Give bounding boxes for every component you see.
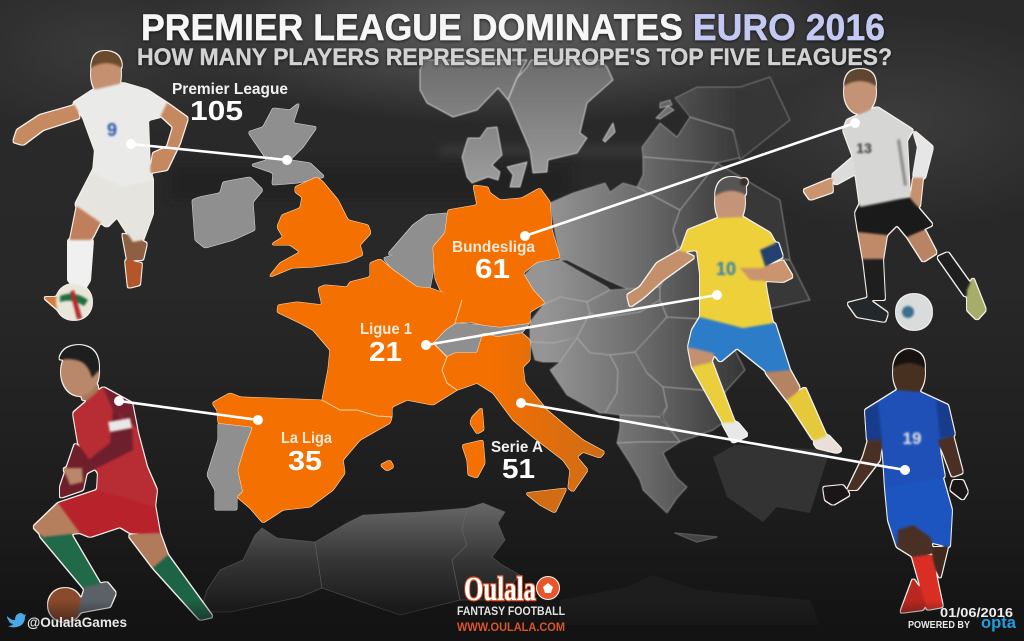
portugal — [207, 423, 253, 510]
switzerland — [433, 322, 530, 357]
label: Serie A: Serie A — [491, 439, 543, 456]
date: 01/06/2016 — [940, 606, 1013, 620]
player: Ibrahimovic: 10 — [716, 259, 736, 279]
grey neighbours — [192, 102, 530, 510]
player: Müller — [803, 69, 986, 330]
head — [91, 51, 122, 106]
label: Bundesliga — [452, 239, 535, 284]
player: Ronaldo — [33, 345, 213, 622]
map of Europe — [192, 60, 830, 625]
label: Bundesliga: Bundesliga — [452, 239, 535, 256]
label: Ligue 1: 21 — [369, 336, 402, 367]
eastern europe — [523, 77, 810, 513]
powered by opta: POWERED BY — [908, 619, 970, 631]
belgium — [383, 245, 435, 288]
shirt number: 9 — [107, 120, 117, 140]
faint libya coast — [560, 575, 820, 625]
ball — [896, 294, 932, 330]
connector lines — [114, 118, 910, 475]
player: Kane — [13, 51, 188, 320]
label: Premier League: 105 — [190, 95, 243, 126]
label: Ligue 1: Ligue 1 — [360, 321, 412, 338]
label: Bundesliga: 61 — [475, 253, 510, 284]
subtitle: HOW MANY PLAYERS REPRESENT EUROPE'S TOP FIVE LEAGUES? — [137, 44, 892, 71]
label: Premier League: Premier League — [172, 81, 288, 98]
player: Ibrahimovic — [627, 177, 842, 453]
icon: ball — [536, 576, 560, 600]
italy — [442, 333, 605, 492]
corsica — [470, 407, 484, 434]
north africa — [200, 503, 520, 615]
line: Ligue 1 — [421, 290, 722, 350]
germany — [433, 185, 560, 327]
label: La Liga: La Liga — [281, 430, 332, 447]
country borders inside orange — [322, 300, 462, 417]
spain — [212, 393, 392, 523]
sardinia — [462, 440, 485, 478]
powered by opta: opta — [981, 613, 1017, 632]
player: Pogba: 19 — [903, 429, 921, 448]
ball — [48, 588, 82, 622]
line: Bundesliga — [520, 118, 860, 241]
scandinavia — [420, 60, 674, 187]
bottom fade — [0, 600, 1024, 641]
player: Pogba — [823, 349, 968, 613]
label: Serie A: 51 — [502, 453, 535, 484]
powered by opta — [908, 613, 1017, 632]
label: La Liga: 35 — [288, 445, 322, 476]
mallorca — [380, 460, 394, 471]
label: Serie A — [491, 439, 543, 484]
label: Ligue 1 — [360, 321, 412, 367]
player: Müller: 13 — [856, 140, 872, 156]
line: Premier League — [126, 139, 292, 165]
fantasy football text: FANTASY FOOTBALL — [457, 606, 565, 618]
line: Serie A — [516, 398, 910, 475]
scotland — [248, 102, 325, 185]
ireland — [192, 177, 263, 248]
france — [277, 259, 462, 417]
ball — [56, 284, 92, 320]
league countries — [212, 177, 605, 523]
label: Premier League — [172, 81, 288, 126]
website: WWW.OULALA.COM — [457, 622, 565, 634]
line: La Liga — [114, 396, 263, 425]
Oulala logo: Oulala — [464, 571, 536, 608]
turkey — [713, 445, 830, 522]
england and wales — [268, 177, 371, 278]
twitter handle: @OulalaGames — [27, 614, 127, 630]
title: PREMIER LEAGUE DOMINATES EURO 2016 — [141, 7, 885, 48]
sicily — [525, 488, 567, 513]
label: La Liga — [281, 430, 332, 476]
crete — [675, 533, 717, 542]
netherlands — [387, 213, 448, 255]
icon: twitter bird — [7, 613, 26, 627]
